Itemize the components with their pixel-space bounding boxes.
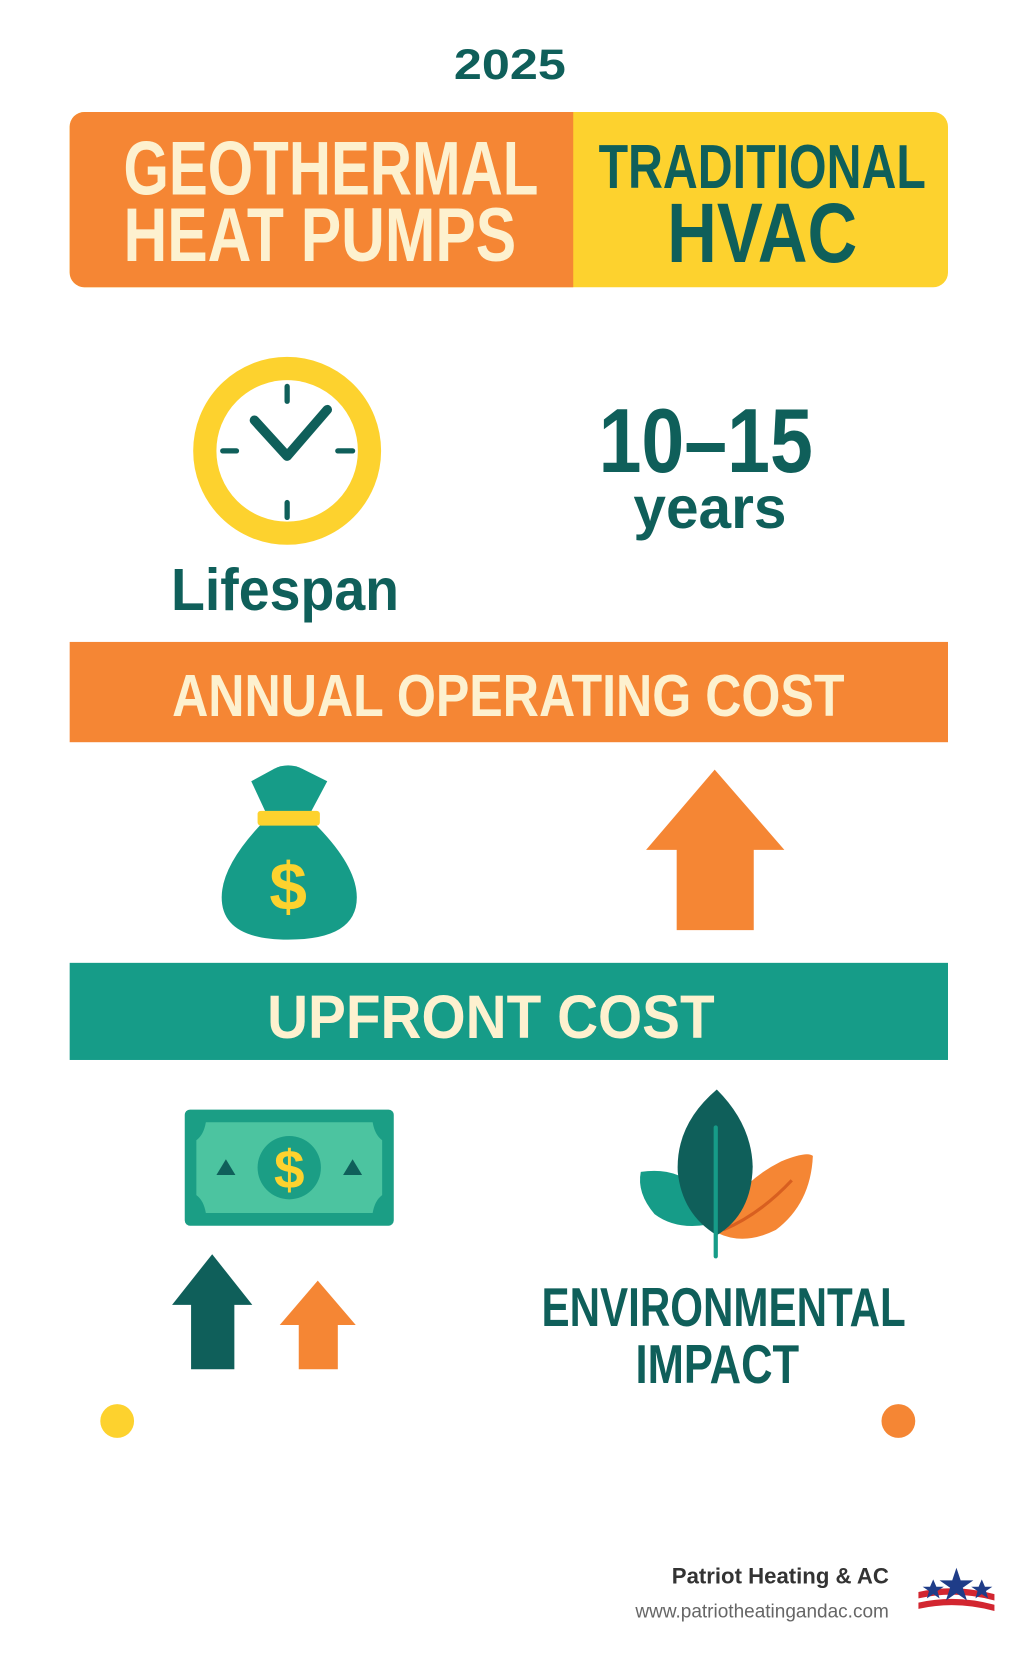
footer: company [634,1564,889,1622]
icon: money bag [222,765,357,940]
banner: upfront cost: UPFRONT COST [267,983,715,1051]
icon: dollar bill [185,1110,394,1226]
header right text [599,133,926,280]
lifespan value: years [633,474,786,541]
footer: company: www.patriotheatingandac.com [634,1601,889,1622]
label: environmental impact [542,1276,906,1395]
icon: money bag: $ [269,850,307,925]
dot: yellow [100,1404,134,1438]
footer: company: Patriot Heating & AC [672,1564,889,1589]
label: environmental impact: IMPACT [636,1333,799,1395]
label: environmental impact: ENVIRONMENTAL [542,1276,906,1338]
header right text: TRADITIONAL [599,133,926,202]
year: 2025 [454,41,566,88]
label: lifespan: Lifespan [171,556,399,623]
header left text [124,126,538,278]
icon: logo flag stars [918,1568,994,1611]
header right text: HVAC [667,186,857,280]
banner: annual operating cost: ANNUAL OPERATING COST [172,662,845,729]
banner: upfront cost [70,963,948,1060]
arrows: upfront comparison [172,1254,356,1369]
icon: dollar bill: $ [274,1139,305,1201]
lifespan value [599,391,813,541]
header left text: HEAT PUMPS [124,193,516,278]
header left text: GEOTHERMAL [124,126,538,211]
icon: leaves [640,1090,813,1256]
arrow: up orange [646,770,784,930]
icon: clock [205,369,369,533]
banner: annual operating cost [70,642,948,742]
header banner [70,112,948,287]
dot: orange [881,1404,915,1438]
lifespan value: 10–15 [599,391,813,492]
